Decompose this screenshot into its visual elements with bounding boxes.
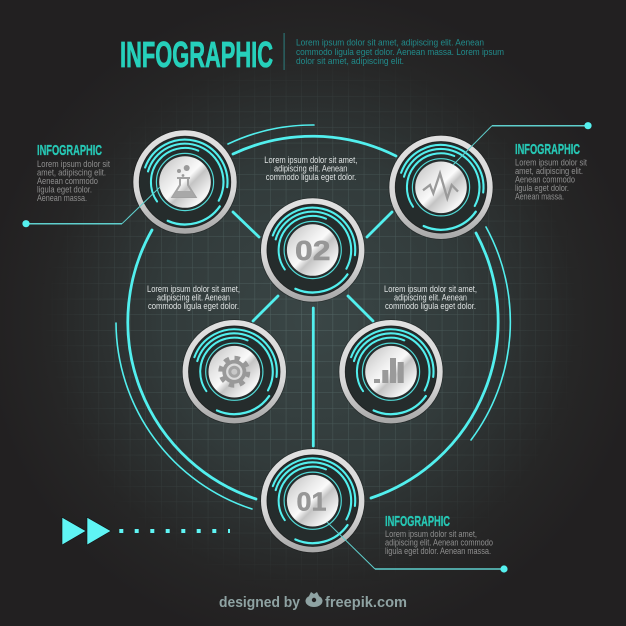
bottom body — [385, 529, 493, 556]
bottom heading: INFOGRAPHIC — [385, 513, 450, 530]
left body: Lorem ipsum dolor sit — [37, 159, 110, 169]
large outer circle arcs — [116, 125, 510, 509]
spokes — [233, 212, 392, 446]
node: flask — [132, 130, 238, 234]
right heading: INFOGRAPHIC — [515, 141, 580, 158]
left panel text — [37, 142, 110, 203]
footer credit: designed by — [219, 595, 300, 611]
header text: Lorem ipsum dolor sit amet, adipiscing elit. Aenean — [296, 36, 484, 48]
center left text: adipiscing elit. Aenean — [157, 292, 230, 302]
icon: flask — [172, 165, 196, 197]
left body — [37, 159, 110, 203]
icon: gear — [221, 358, 248, 385]
right body: Aenean commodo — [515, 174, 575, 184]
right body: ligula eget dolor. — [515, 183, 569, 193]
arrow 2 — [87, 517, 111, 545]
node: gear — [182, 319, 287, 424]
right body: Lorem ipsum dolor sit — [515, 158, 587, 168]
center top text: adipiscing elit. Aenean — [274, 164, 347, 174]
bottom panel text — [385, 513, 493, 556]
footer credit: freepik.com — [325, 595, 407, 611]
bottom body: ligula eget dolor. Aenean massa. — [385, 546, 491, 556]
node: 02 — [260, 198, 365, 302]
left body: ligula eget dolor. — [37, 184, 92, 194]
bottom body: Lorem ipsum dolor sit amet, — [385, 529, 477, 539]
node: wave — [388, 135, 494, 240]
header divider — [284, 33, 285, 70]
center top text: commodo ligula eget dolor. — [266, 172, 356, 182]
node: bar chart — [338, 319, 444, 424]
right body: amet, adipiscing elit. — [515, 166, 583, 176]
center left text — [147, 284, 240, 311]
leader line bottom — [327, 522, 508, 573]
center left text: Lorem ipsum dolor sit amet, — [147, 284, 240, 294]
dotted line — [119, 529, 230, 533]
arrow 1 — [62, 517, 86, 545]
center top text — [264, 155, 357, 182]
number 02: 02 — [295, 235, 330, 266]
icon: wave — [423, 173, 458, 198]
center top text: Lorem ipsum dolor sit amet, — [264, 155, 357, 165]
title: INFOGRAPHIC — [120, 34, 273, 75]
arrows and dots — [62, 517, 230, 545]
grid — [70, 78, 555, 562]
right body: Aenean massa. — [515, 192, 564, 202]
center left text: commodo ligula eget dolor. — [148, 301, 239, 311]
left body: amet, adipiscing elit. — [37, 168, 106, 178]
center right text: Lorem ipsum dolor sit amet, — [384, 284, 477, 294]
leader line right — [453, 122, 592, 165]
leader line left — [22, 187, 160, 227]
center right text: commodo ligula eget dolor. — [385, 301, 476, 311]
footer credit — [219, 592, 407, 611]
node: 01 — [260, 448, 365, 553]
icon: freepik logo — [306, 592, 322, 607]
left body: Aenean commodo — [37, 176, 98, 186]
center right text — [384, 284, 477, 311]
header text — [296, 36, 504, 66]
icon: bar chart — [374, 358, 404, 383]
left heading: INFOGRAPHIC — [37, 142, 102, 159]
left body: Aenean massa. — [37, 193, 87, 203]
center right text: adipiscing elit. Aenean — [394, 292, 467, 302]
right panel text — [515, 141, 587, 202]
right body — [515, 158, 587, 202]
bottom body: adipiscing elit. Aenean commodo — [385, 538, 493, 548]
number 01: 01 — [296, 486, 326, 516]
header text: dolor sit amet, adipiscing elit. — [296, 55, 404, 66]
header text: commodo ligula eget dolor. Aenean massa. Lorem ipsum — [296, 46, 504, 57]
